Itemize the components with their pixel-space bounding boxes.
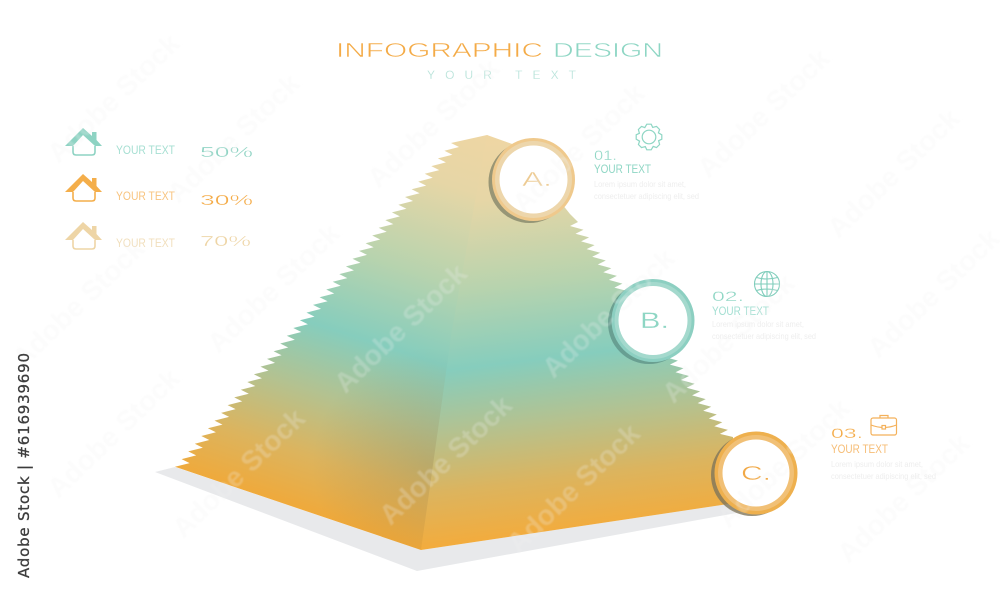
item 03 number: 03. — [831, 425, 863, 441]
text: row 1 label: YOUR TEXT — [116, 143, 176, 157]
watermarks: Adobe Stock — [711, 392, 856, 534]
watermarks: Adobe Stock — [831, 427, 976, 569]
watermarks: Adobe Stock — [361, 52, 506, 194]
item 01 number: 01. — [594, 147, 617, 163]
text: row 3 label: YOUR TEXT — [116, 236, 176, 250]
icon: teal house — [65, 128, 102, 155]
title: INFOGRAPHIC — [336, 40, 543, 62]
badge B letter: B. — [640, 308, 669, 333]
title: DESIGN — [553, 40, 663, 62]
watermarks: Adobe Stock — [501, 417, 646, 559]
item 03 — [831, 416, 936, 481]
icon: briefcase — [871, 416, 896, 435]
item 01 heading: YOUR TEXT — [594, 162, 652, 176]
watermarks: Adobe Stock — [656, 267, 801, 409]
text: 30 percent: 30% — [200, 192, 253, 209]
text: 50 percent: 50% — [200, 144, 253, 161]
item 02 number: 02. — [712, 288, 744, 304]
watermarks: Adobe Stock — [373, 389, 518, 531]
item 02 body: Lorem ipsum dolor sit amet, — [712, 319, 804, 329]
subtitle: YOUR TEXT — [427, 68, 577, 82]
badge A — [488, 138, 575, 223]
icon: orange house — [65, 174, 102, 201]
item 03 body: Lorem ipsum dolor sit amet, — [831, 459, 923, 469]
item 02 body: consectetuer adipiscing elit, sed — [712, 331, 816, 341]
watermarks: Adobe Stock — [161, 67, 306, 209]
watermarks: Adobe Stock — [821, 102, 966, 244]
title — [336, 40, 663, 62]
item 03 heading: YOUR TEXT — [831, 442, 889, 456]
pyramid — [175, 135, 735, 550]
watermarks: Adobe Stock — [6, 232, 151, 374]
watermarks: Adobe Stock — [691, 42, 836, 184]
pyramid ground shadow — [155, 467, 742, 571]
watermarks: Adobe Stock — [41, 362, 186, 504]
badge A letter: A. — [522, 169, 552, 191]
watermarks: Adobe Stock — [41, 27, 186, 169]
text: row 2 label: YOUR TEXT — [116, 189, 176, 203]
item 01 body: Lorem ipsum dolor sit amet, — [594, 179, 686, 189]
watermarks: Adobe Stock — [328, 257, 473, 399]
item 02 heading: YOUR TEXT — [712, 304, 770, 318]
pyramid left face ridge shading — [300, 345, 452, 550]
badge C letter: C. — [741, 463, 771, 485]
icon: globe — [754, 272, 780, 296]
item 01 body: consectetuer adipiscing elit, sed — [594, 191, 699, 201]
watermarks: Adobe Stock — [506, 77, 651, 219]
legend: house rows — [65, 128, 253, 250]
text: 70 percent: 70% — [200, 233, 251, 250]
watermarks: Adobe Stock — [201, 217, 346, 359]
item 02 body — [712, 319, 816, 341]
item 03 body — [831, 459, 936, 481]
item 01 — [594, 124, 699, 201]
badge C — [711, 432, 798, 516]
item 02 — [712, 272, 816, 341]
watermarks: Adobe Stock — [166, 402, 311, 544]
badge B — [608, 279, 694, 364]
stock id vertical label: Adobe Stock | #616939690 — [15, 353, 33, 578]
pyramid right face — [421, 135, 735, 550]
item 01 body — [594, 179, 699, 201]
icon: tan house — [65, 222, 102, 249]
icon: gear — [636, 124, 662, 150]
pyramid left face — [175, 135, 489, 550]
watermarks: Adobe Stock — [536, 242, 681, 384]
item 03 body: consectetuer adipiscing elit, sed — [831, 471, 936, 481]
